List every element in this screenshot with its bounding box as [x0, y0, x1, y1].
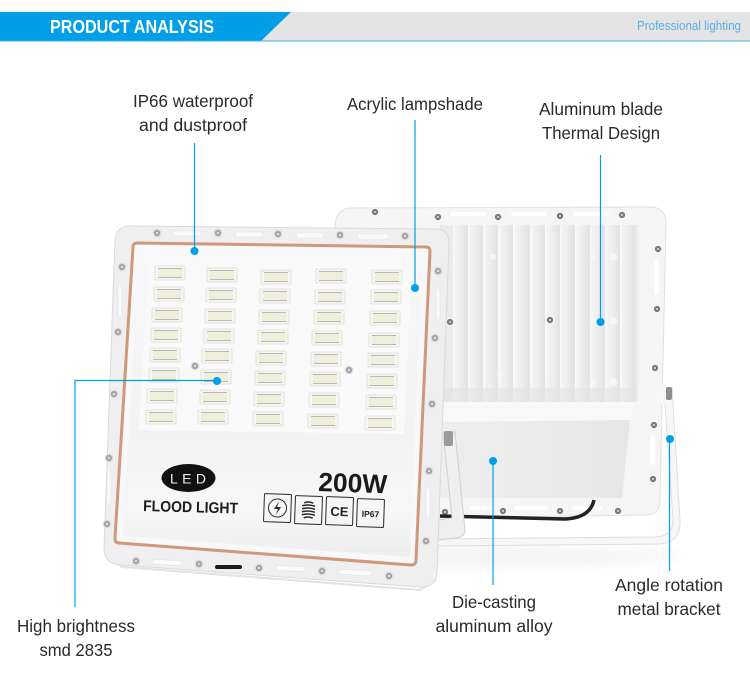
certification icons — [264, 494, 384, 527]
flood light front view — [103, 226, 449, 590]
callout: high brightness — [17, 377, 221, 660]
screws on back frame — [370, 207, 663, 517]
callout: aluminum blade: Thermal Design — [542, 123, 660, 143]
orange gasket — [115, 243, 430, 565]
blade bumps — [490, 253, 617, 386]
callout: die-casting: aluminum alloy — [436, 616, 553, 636]
flood light wordmark: FLOOD LIGHT — [143, 498, 239, 517]
lower die-cast body — [440, 402, 634, 498]
LED badge — [162, 464, 216, 492]
fin base shading — [440, 388, 636, 402]
outer frame — [104, 226, 449, 587]
led board — [139, 258, 412, 434]
callout: angle rotation: metal bracket — [618, 599, 721, 619]
back housing frame — [335, 207, 666, 518]
icon: lightning — [264, 494, 291, 522]
header underline — [0, 40, 750, 42]
callout: IP66 waterproof: IP66 waterproof — [133, 91, 253, 111]
floor shadow — [120, 544, 680, 568]
wattage: 200W — [318, 467, 388, 499]
lower body highlight — [440, 402, 634, 422]
callout: die-casting: Die-casting — [452, 592, 536, 612]
callout: IP66 waterproof — [133, 91, 253, 255]
left bracket arm — [438, 431, 465, 540]
callout: acrylic lampshade: Acrylic lampshade — [347, 94, 483, 114]
inner panel — [123, 250, 422, 557]
led modules — [146, 266, 402, 430]
icon: CE mark: CE — [330, 504, 349, 519]
LED badge: LED — [170, 470, 206, 486]
callout: die-casting — [436, 457, 553, 636]
flood light back view — [335, 207, 680, 546]
power cable — [440, 500, 594, 519]
frame slots — [450, 212, 659, 510]
header tagline: Professional lighting — [637, 19, 741, 33]
front shadow — [106, 554, 436, 590]
callout: aluminum blade: Aluminum blade — [539, 99, 663, 119]
callout: angle rotation: Angle rotation — [615, 575, 723, 595]
icon: IP67: IP67 — [362, 509, 380, 519]
header grey band — [0, 12, 750, 41]
rear angle bracket — [430, 388, 680, 546]
callout: high brightness: High brightness — [17, 616, 135, 636]
heat sink blades — [440, 225, 638, 402]
right bracket pivot — [654, 385, 672, 405]
callout: acrylic lampshade — [347, 94, 483, 292]
black slot — [215, 565, 242, 569]
header bar — [0, 12, 750, 42]
callout: angle rotation — [615, 435, 723, 619]
heading: PRODUCT ANALYSIS — [50, 16, 214, 37]
callout: aluminum blade — [539, 99, 663, 326]
front frame screws — [103, 229, 442, 580]
callout: IP66 waterproof: and dustproof — [139, 115, 247, 135]
icon: heat sink — [295, 496, 322, 524]
frame slots front — [107, 231, 440, 576]
callout: high brightness: smd 2835 — [40, 640, 112, 660]
header blue tab — [0, 12, 291, 41]
